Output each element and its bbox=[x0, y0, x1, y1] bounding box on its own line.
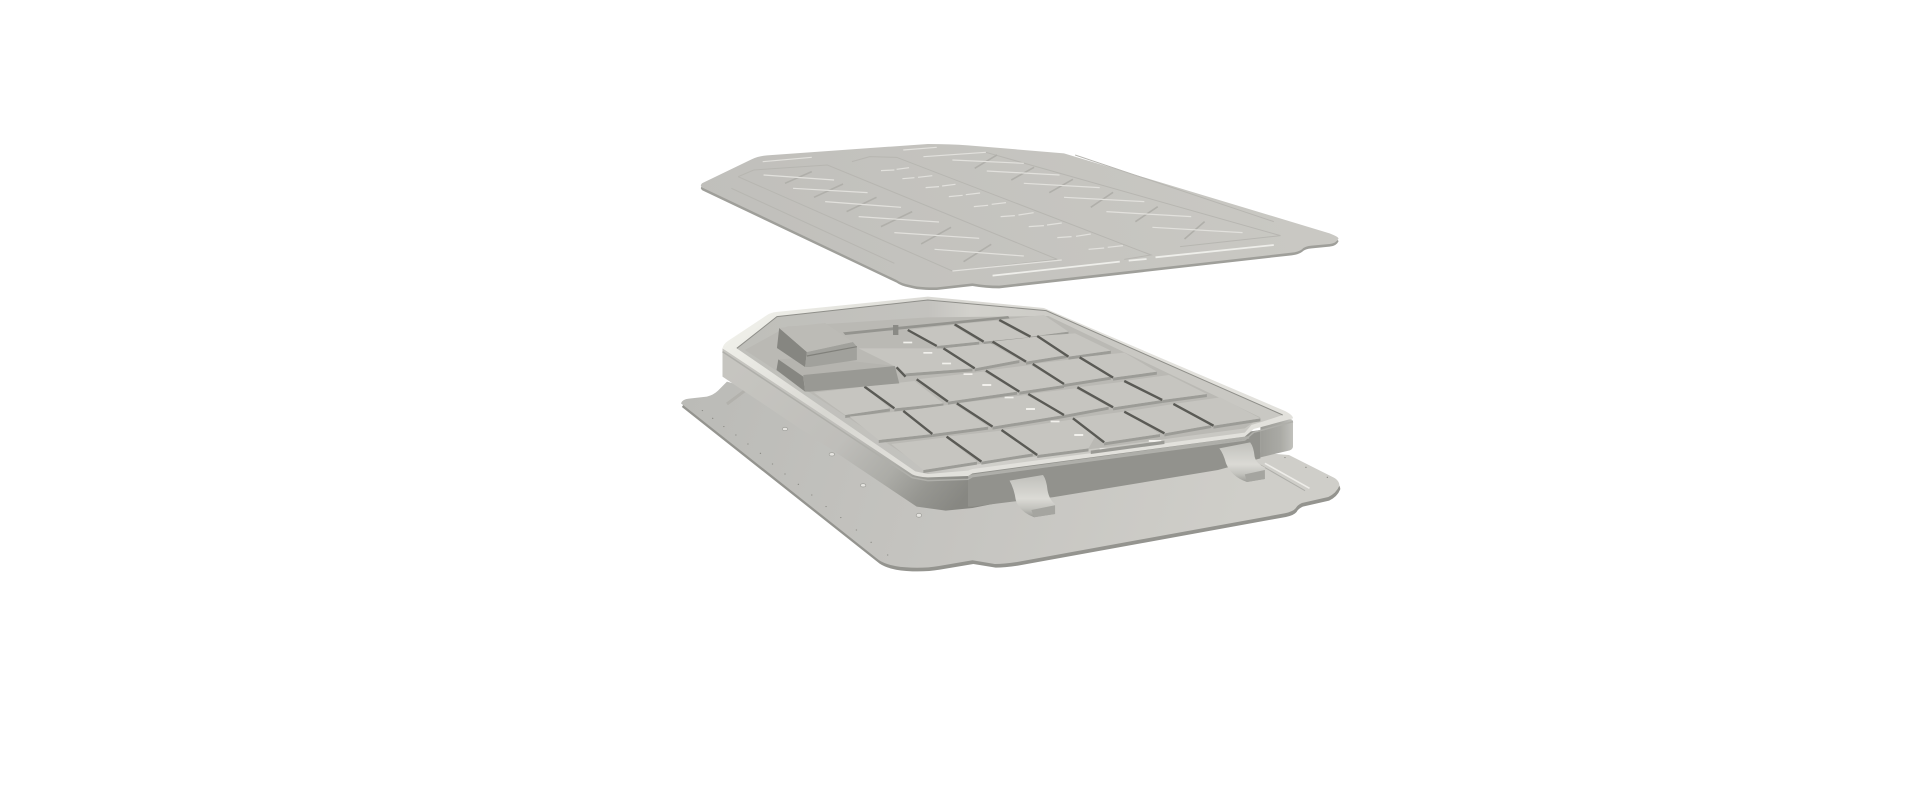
mounting tab right bbox=[1219, 442, 1265, 482]
mounting tab left bbox=[1010, 475, 1055, 517]
base plate top face bbox=[681, 382, 1339, 568]
cover plate embossed crosses bbox=[785, 155, 1205, 262]
tray rim bbox=[722, 297, 1293, 477]
cover plate highlighted ribs bbox=[763, 147, 1243, 271]
battery cell dark gaps bbox=[864, 320, 1214, 462]
cover plate lower bright ribs bbox=[993, 245, 1274, 276]
tray left front wall bbox=[722, 348, 1013, 511]
base plate slot bbox=[1260, 463, 1310, 491]
busbar strip at back of tray bbox=[843, 316, 1010, 335]
connector post bbox=[893, 325, 898, 335]
lower module front face bbox=[803, 366, 899, 392]
left tab body bbox=[1010, 475, 1055, 517]
cover plate edge bbox=[701, 147, 1339, 290]
top cover plate bbox=[701, 144, 1339, 290]
battery cell top faces bbox=[814, 315, 1260, 470]
upper module left face bbox=[777, 328, 807, 367]
tray cavity bbox=[737, 300, 1283, 474]
tray right wall bbox=[1260, 419, 1293, 457]
cover plate channels bbox=[731, 152, 1280, 271]
lower module top strip bbox=[778, 358, 895, 377]
electronics cluster at tray front bbox=[1091, 441, 1164, 454]
tray front wall bbox=[968, 430, 1260, 507]
battery tray assembly bbox=[681, 297, 1340, 571]
tray rim outer shade bbox=[722, 352, 1293, 481]
upper module seam bbox=[807, 347, 857, 356]
upper module top face bbox=[779, 323, 853, 352]
base plate mounting holes bbox=[782, 427, 922, 517]
base plate dashed fasteners bbox=[702, 410, 1328, 556]
base plate faint recess bbox=[727, 391, 745, 404]
lower electronics module bbox=[777, 358, 899, 392]
right tab body bbox=[1219, 442, 1265, 482]
tray front wall upper ledge bbox=[968, 436, 1249, 478]
upper module front face bbox=[805, 342, 857, 367]
battery cell lips bbox=[845, 332, 1260, 473]
upper electronics module bbox=[777, 323, 857, 367]
tray floor bbox=[745, 316, 1260, 470]
cover plate top face bbox=[701, 144, 1339, 287]
tray cavity inner outline bbox=[737, 300, 1283, 415]
base plate edge bbox=[682, 385, 1340, 571]
bright terminal pads bbox=[903, 342, 1161, 451]
lower module left face bbox=[777, 359, 805, 392]
left tab foot bbox=[1031, 505, 1055, 517]
right tab foot bbox=[1245, 470, 1265, 482]
